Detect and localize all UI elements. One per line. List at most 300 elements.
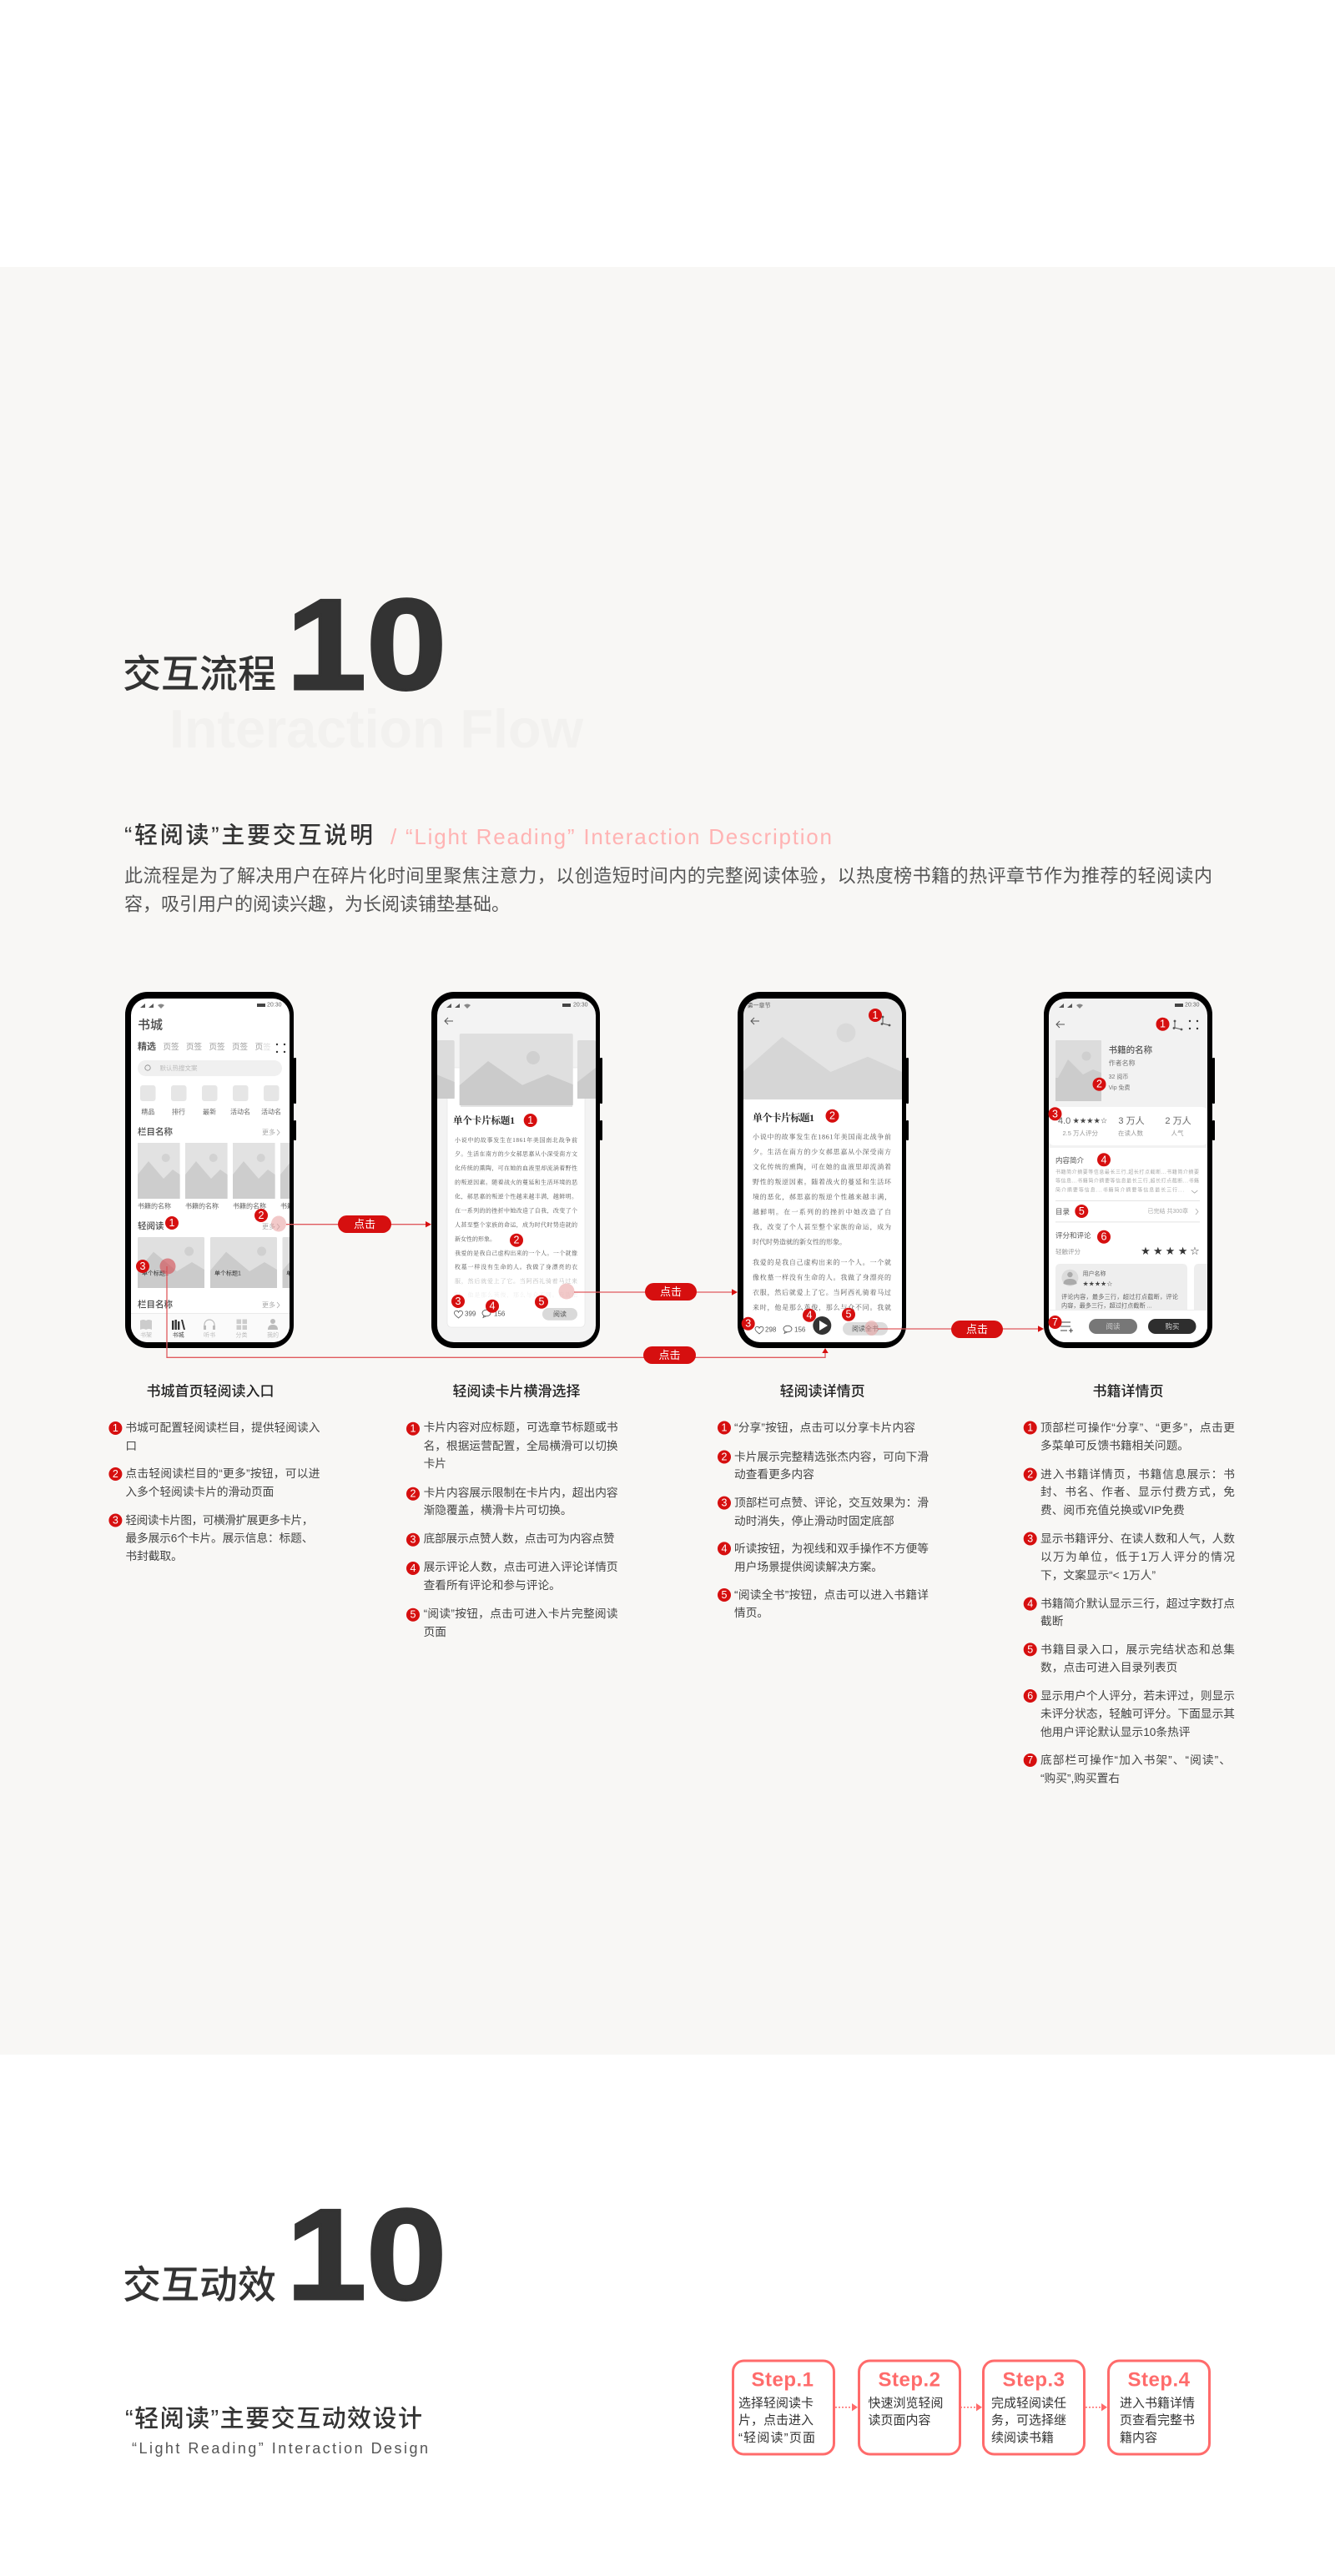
item 5	[718, 1588, 929, 1619]
intro block: 简介摘要等信息...书籍简介摘要等信息最长三行...	[1055, 1186, 1184, 1193]
chinese sub heading: “轻阅读”主要交互说明	[124, 823, 373, 848]
body text: 境的恶化，郝思嘉的叛逆个性越来越丰满，	[753, 1193, 891, 1201]
badges phone 2: 3	[456, 1296, 461, 1307]
item 1	[406, 1420, 618, 1470]
bottom tab bar: 书城	[173, 1331, 184, 1338]
item 6: 6	[1027, 1690, 1033, 1702]
phone 3: light reading detail	[738, 992, 909, 1348]
phone 1: bookstore home: 20:30	[267, 1003, 282, 1008]
touch hint: more	[271, 1216, 286, 1231]
badges phone 4: 6	[1101, 1231, 1107, 1243]
bottom tab bar: 书架	[140, 1331, 152, 1338]
stats panel: ★★★★☆	[1073, 1116, 1107, 1126]
comment card: 内容，最多三行，超过打点截断 ...	[1061, 1301, 1152, 1310]
rating row: ★	[1141, 1245, 1151, 1258]
section row: column name: 更多	[262, 1128, 275, 1136]
step 2 card: Step.2	[878, 2369, 941, 2391]
item 2: 2	[113, 1468, 118, 1480]
body text: 像枚墓一样没有生命的人。我做了身漂亮的	[753, 1273, 891, 1281]
item 4: 展示评论人数，点击可进入评论详情页	[424, 1561, 618, 1573]
badges phone 2: 2	[514, 1235, 520, 1246]
item 1	[1024, 1421, 1235, 1452]
item 1: 卡片内容对应标题，可选章节标题或书	[424, 1420, 618, 1433]
light reading cards	[138, 1237, 290, 1288]
intro block: 书籍简介摘要等信息最长三行,超长打点截断...书籍简介摘要	[1055, 1169, 1199, 1175]
item 3: 最多展示6个卡片。展示信息：标题、	[125, 1532, 313, 1545]
icon: back arrow	[751, 1018, 759, 1024]
title: 单个卡片标题1	[753, 1111, 814, 1124]
phone 4: book detail: 20:30	[1185, 1003, 1200, 1008]
badges phone 2: 4	[490, 1301, 496, 1312]
badges on phones	[136, 1009, 1170, 1331]
item 4	[718, 1542, 929, 1573]
item 2: 动查看更多内容	[734, 1467, 814, 1481]
stats panel: 人气	[1171, 1129, 1184, 1137]
item 2: 2	[722, 1452, 728, 1463]
bottom action bar	[1049, 1310, 1207, 1342]
stats panel: 2 万人	[1165, 1115, 1191, 1126]
item 1: 口	[125, 1440, 137, 1452]
badges phone 4: 2	[1096, 1079, 1102, 1090]
item 2	[406, 1486, 618, 1517]
item 5: “阅读全书”按钮，点击可以进入书籍详	[734, 1588, 929, 1602]
item 5: 5	[411, 1609, 416, 1621]
bottom tab bar	[131, 1313, 290, 1342]
item 3: 轻阅读卡片图，可横滑扩展更多卡片，	[125, 1513, 313, 1527]
body text: 夕。生活在南方的少女郝思嘉从小深受南方	[753, 1148, 891, 1156]
body text: 来时，他是那么英俊，那么与众不同。我就	[753, 1303, 891, 1312]
like and comment counts	[454, 1310, 506, 1318]
arrow 1 to 2	[835, 2403, 858, 2411]
step 3 card: Step.3	[1002, 2369, 1065, 2391]
item 1: 多菜单可反馈书籍相关问题。	[1040, 1438, 1189, 1452]
body text: 我，改变了个人甚至整个家族的命运，成为	[753, 1223, 891, 1231]
shortcut labels	[142, 1108, 280, 1114]
badges phone 3: 4	[807, 1310, 813, 1321]
section row: light reading: 轻阅读	[138, 1220, 164, 1231]
step 3 card: 续阅读书籍	[991, 2431, 1054, 2445]
like and comment counts	[755, 1326, 806, 1334]
big number 10: 10	[286, 2181, 446, 2327]
phone 4: book detail	[1044, 992, 1219, 1348]
description paragraph	[124, 866, 1212, 914]
section row: column name 2: 更多	[262, 1301, 275, 1309]
item 4: 书籍简介默认显示三行，超过字数打点	[1040, 1597, 1235, 1610]
item 3: 底部展示点赞人数，点击可为内容点赞	[424, 1532, 615, 1545]
side card right	[577, 1040, 596, 1099]
body text: 时代时势造就的新女性的形象。	[753, 1238, 846, 1246]
book info: 书籍的名称	[1109, 1044, 1153, 1055]
item 3: 动时消失，停止滑动时固定底部	[734, 1514, 894, 1527]
light reading cards: 单个	[286, 1270, 298, 1276]
ghost english title: Interaction Flow	[169, 698, 583, 759]
book thumbnails: 书籍的名称	[138, 1201, 171, 1210]
sub heading: motion design	[125, 2405, 428, 2457]
card body text: 在一系列的的挫折中她改造了自我，改变了个	[455, 1206, 577, 1215]
rating row: ★	[1178, 1245, 1187, 1258]
badges phone 3: 1	[873, 1009, 879, 1021]
header image	[743, 999, 902, 1099]
intro block: 内容简介	[1055, 1156, 1085, 1165]
book info	[1109, 1044, 1153, 1091]
item 6	[1024, 1688, 1235, 1738]
read full book button: 阅读全书	[852, 1325, 879, 1333]
card body text: 新女性的形象。	[455, 1235, 496, 1242]
item 2: 卡片展示完整精选张杰内容，可向下滑	[734, 1450, 929, 1463]
item 2: 费、阅币充值兑换或VIP免费	[1040, 1503, 1185, 1517]
catalog row: 目录	[1055, 1208, 1071, 1216]
chinese sub heading: “轻阅读”主要交互动效设计	[125, 2405, 422, 2433]
icon: share	[1173, 1020, 1182, 1030]
step 4 card: 进入书籍详情	[1120, 2396, 1195, 2411]
badges phone 4	[1048, 1018, 1170, 1329]
item 4: 4	[1027, 1598, 1033, 1610]
book thumbnails: 书籍的名称	[185, 1201, 219, 1210]
item 2: 卡片内容展示限制在卡片内，超出内容	[424, 1486, 618, 1499]
heading: 交互动效: 交互动效	[123, 2263, 276, 2307]
item 7: 底部栏可操作“加入书架”、“阅读”、	[1040, 1753, 1231, 1767]
arrow: from phone 3 to phone 4	[878, 1321, 1044, 1338]
read button: 阅读	[553, 1310, 567, 1318]
stats panel: 在读人数	[1118, 1129, 1143, 1137]
item 3: 显示书籍评分、在读人数和人气，人数	[1040, 1532, 1235, 1545]
item 2	[1024, 1467, 1235, 1517]
item 6: 他用户评论默认显示10条热评	[1040, 1725, 1191, 1738]
item 3: 以万为单位，低于1万人评分的情况	[1040, 1551, 1235, 1563]
item 3: 书封截取。	[125, 1550, 183, 1562]
card panel	[447, 1068, 585, 1327]
phone 1: bookstore home	[125, 992, 296, 1348]
section row: column name	[138, 1127, 280, 1136]
card body text: 化传统的熏陶，可在她的血液里却流淌着野性	[455, 1165, 577, 1173]
book thumbnails: 书籍的名称	[233, 1201, 266, 1210]
stats panel: 2.5 万人评分	[1062, 1130, 1098, 1137]
item 3: 下，文案显示“< 1万人”	[1040, 1568, 1156, 1582]
touch hint: read	[559, 1283, 574, 1300]
badges phone 4: 5	[1079, 1205, 1085, 1217]
phone 2: card swipe selection: 20:30	[573, 1003, 588, 1008]
step 2 card: 读页面内容	[868, 2413, 931, 2428]
body text: 野性的叛逆因素。随着战火的蔓延和生活环	[753, 1178, 892, 1186]
item 3: 3	[1027, 1533, 1033, 1545]
rating row	[1055, 1231, 1200, 1258]
item 4: 用户场景提供阅读解决方案。	[734, 1560, 883, 1573]
arrow: from phone 1 card to phone 3: 点击	[658, 1349, 681, 1361]
section row: light reading: 更多	[262, 1222, 275, 1230]
arrow: from phone 2 to phone 3	[574, 1283, 738, 1301]
icon: play button	[813, 1316, 831, 1335]
item 1: “分享”按钮，点击可以分享卡片内容	[734, 1421, 915, 1434]
item 1: 1	[1027, 1421, 1033, 1433]
badges phone 4: 3	[1052, 1108, 1058, 1119]
item 7	[1024, 1753, 1231, 1785]
body text	[753, 1133, 892, 1312]
like and comment counts: 298	[765, 1326, 777, 1333]
badges phone 4: 4	[1101, 1154, 1107, 1165]
card body text: 服，然后就爱上了它。当阿西礼骑着马过来	[455, 1277, 577, 1285]
phone 3: light reading detail: 第一章节	[748, 1001, 771, 1009]
tabs: 页签	[186, 1042, 203, 1052]
description paragraph: 此流程是为了解决用户在碎片化时间里聚焦注意力，以创造短时间内的完整阅读体验，以热度榜书籍的热评章节作为推荐的轻阅读内	[124, 866, 1212, 886]
tabs: 精选	[138, 1040, 156, 1052]
comment card: 用户名称	[1083, 1270, 1106, 1277]
card title: 单个卡片标题1	[453, 1114, 515, 1126]
step 4 card: Step.4	[1127, 2369, 1191, 2391]
rating row: ★	[1153, 1245, 1163, 1258]
column heading: 轻阅读详情页	[780, 1383, 865, 1400]
shortcut labels: 活动名	[230, 1108, 250, 1116]
item 5: 书籍目录入口，展示完结状态和总集	[1040, 1643, 1235, 1656]
body text: 小说中的故事发生在1861年美国南北战争前	[753, 1133, 891, 1141]
item 3: 顶部栏可点赞、评论，交互效果为：滑	[734, 1496, 929, 1509]
badges phone 1: 1	[169, 1217, 175, 1229]
item 2: 2	[411, 1488, 416, 1500]
step 1 card: 片，点击进入	[738, 2413, 814, 2428]
arrow: from phone 3 to phone 4: 点击	[966, 1323, 988, 1336]
item 3: 3	[113, 1515, 118, 1527]
column heading: 书籍详情页	[1093, 1383, 1163, 1400]
bottom action bar: 购买	[1165, 1322, 1180, 1331]
section header: interaction flow	[123, 571, 583, 759]
item 2	[718, 1450, 929, 1481]
catalog row	[1055, 1207, 1200, 1222]
icon: back arrow	[445, 1018, 453, 1024]
tabs	[138, 1040, 285, 1053]
light reading cards: 单个标题1	[142, 1270, 169, 1276]
item 1: 名，根据运营配置，全局横滑可以切换	[424, 1439, 618, 1452]
stats panel	[1049, 1107, 1207, 1342]
search bar	[138, 1060, 282, 1076]
section row: column name 2: 栏目名称	[138, 1299, 173, 1310]
step 1 card: Step.1	[751, 2369, 814, 2391]
column 2: card swipe	[406, 1383, 618, 1638]
tabs: 页签	[209, 1042, 225, 1052]
touch hint: read full book	[864, 1321, 878, 1336]
item 5	[1024, 1643, 1235, 1673]
light reading cards: 单个标题1	[214, 1270, 241, 1276]
card body text: 我爱的是我自己虚构出来的一个人。一个就像	[455, 1249, 577, 1256]
item 4: 4	[411, 1562, 416, 1574]
catalog row: 已完结 共300章	[1148, 1207, 1188, 1215]
comment card: 评论内容，最多三行，超过打点截断，评论	[1061, 1293, 1179, 1301]
badges phone 3: 3	[745, 1318, 751, 1330]
body text: 衣服，然后就爱上了它。当阿西礼骑着马过	[753, 1288, 891, 1297]
badges phone 2: 1	[527, 1114, 533, 1126]
book thumbnails: 书籍的名称	[280, 1201, 314, 1210]
step 1 card: 选择轻阅读卡	[738, 2396, 814, 2411]
column 1: bookstore home entry	[108, 1383, 320, 1562]
item 4	[406, 1561, 618, 1592]
item 4	[1024, 1597, 1235, 1628]
card body text: 夕。生活在南方的少女郝思嘉从小深受南方文	[455, 1150, 577, 1158]
body text: 我爱的是我自己虚构出来的一个人。一个就	[753, 1258, 891, 1266]
card body text: 人甚至整个家族的命运，成为时代时势造就的	[455, 1220, 577, 1229]
item 5: 情页。	[734, 1607, 768, 1619]
side card left	[436, 1040, 455, 1099]
item 4: 截断	[1040, 1615, 1064, 1628]
shortcut labels: 精品	[141, 1108, 154, 1116]
english sub heading: “Light Reading” Interaction Design	[132, 2440, 428, 2457]
read button	[542, 1308, 577, 1321]
arrow: from phone 2 to phone 3: 点击	[660, 1285, 682, 1298]
arrow: from phone 1 card to phone 3	[167, 1266, 829, 1364]
item 2: 封、书名、作者、显示付费方式，免	[1040, 1486, 1235, 1498]
shortcut labels: 活动名	[261, 1108, 281, 1116]
touch hint: card	[160, 1258, 175, 1275]
book cover	[1055, 1040, 1101, 1101]
column 3: light reading detail	[718, 1383, 929, 1619]
item 5: 数，点击可进入目录列表页	[1040, 1662, 1177, 1673]
section row: column name 2	[138, 1300, 280, 1308]
item 2	[108, 1467, 320, 1498]
shortcut icons	[140, 1085, 279, 1101]
item 5	[406, 1607, 618, 1638]
item 3	[1024, 1532, 1235, 1582]
icon: more	[1189, 1020, 1198, 1029]
section row: light reading	[138, 1221, 280, 1230]
sub heading: light reading description	[124, 823, 832, 849]
item 3: 3	[722, 1497, 728, 1509]
description paragraph: 容，吸引用户的阅读兴趣，为长阅读铺垫基础。	[124, 894, 510, 914]
tabs: 页签	[255, 1042, 271, 1052]
step 1 card	[733, 2361, 834, 2454]
item 5: 5	[722, 1589, 728, 1601]
item 2: 点击轻阅读栏目的“更多”按钮，可以进	[125, 1467, 320, 1480]
item 1: 书城可配置轻阅读栏目，提供轻阅读入	[125, 1421, 320, 1434]
panel: interaction flow section	[0, 267, 1335, 2055]
section header: interaction motion	[123, 2181, 446, 2327]
stats panel: 4.0	[1058, 1116, 1071, 1126]
column 4: book detail	[1024, 1383, 1235, 1785]
badges phone 2: 5	[539, 1296, 545, 1308]
icon: share	[881, 1016, 890, 1026]
column heading: 轻阅读卡片横滑选择	[452, 1383, 581, 1400]
item 1	[108, 1421, 320, 1452]
like and comment counts: 399	[465, 1310, 476, 1318]
rating row: 评分和评论	[1055, 1231, 1091, 1240]
badges phone 1: 2	[259, 1210, 264, 1221]
tabs: 页签	[164, 1042, 179, 1052]
rating row: ★	[1166, 1245, 1175, 1258]
card body text: 枚墓一样没有生命的人。我做了身漂亮的衣	[455, 1263, 577, 1270]
item 1: 卡片	[424, 1457, 446, 1470]
item 4: 听读按钮，为视线和双手操作不方便等	[734, 1542, 929, 1555]
step 3 card	[983, 2361, 1085, 2454]
item 1: 1	[113, 1422, 118, 1434]
step 4 card	[1108, 2361, 1210, 2454]
item 2: 入多个轻阅读卡片的滑动页面	[125, 1485, 274, 1498]
item 1: 1	[411, 1423, 416, 1435]
book info: 32 阅币	[1109, 1074, 1128, 1080]
arrow 3 to 4	[1086, 2403, 1107, 2411]
book info: 作者名称	[1109, 1059, 1136, 1067]
item 3: 3	[411, 1534, 416, 1546]
icon: back arrow	[1056, 1021, 1065, 1028]
arrow: from phone 1 more button to phone 2	[286, 1215, 431, 1233]
badges phone 3: 5	[846, 1309, 852, 1321]
comment card	[1055, 1264, 1219, 1314]
item 1: 1	[722, 1421, 728, 1433]
bottom action bar: 阅读	[1106, 1322, 1121, 1331]
shortcut labels: 排行	[172, 1108, 185, 1116]
step 2 card: 快速浏览轻阅	[868, 2396, 943, 2411]
step 3 card: 务，可选择继	[991, 2413, 1066, 2428]
comment card: ★★★★☆	[1083, 1280, 1112, 1288]
step 2 card	[859, 2361, 960, 2454]
badges phone 4: 7	[1052, 1316, 1058, 1328]
card body text: 时，他是那么英俊，那么与众不同。我就把	[455, 1291, 577, 1300]
step 4 card: 页查看完整书	[1120, 2413, 1195, 2428]
card body text: 化，郝思嘉的叛逆个性越来越丰满，越鲜明。	[455, 1192, 577, 1200]
book thumbnails	[138, 1143, 290, 1210]
body text: 文化传统的熏陶，可在她的血液里却流淌着	[753, 1163, 891, 1171]
card body text: 小说中的故事发生在1861年美国南北战争前	[455, 1136, 577, 1144]
badges phone 1: 3	[140, 1260, 146, 1272]
arrow 2 to 3	[960, 2403, 982, 2411]
card body text: 的叛逆因素。随着战火的蔓延和生活环境的恶	[455, 1179, 578, 1186]
shortcut labels: 最新	[203, 1108, 216, 1116]
body text: 越鲜明。在一系列的的挫折中她改造了自	[753, 1208, 891, 1216]
title 书城: 书城	[138, 1018, 163, 1033]
item 2: 渐隐覆盖，横滑卡片可切换。	[424, 1503, 572, 1517]
english sub heading: / “Light Reading” Interaction Description	[390, 824, 832, 849]
bottom tab bar: 听书	[204, 1331, 215, 1338]
read full book button	[843, 1322, 888, 1336]
badges phone 3: 2	[829, 1110, 835, 1122]
step 4 card: 籍内容	[1120, 2431, 1157, 2445]
intro block	[1055, 1156, 1200, 1201]
step 1 card: “轻阅读”页面	[738, 2431, 815, 2445]
arrow: from phone 1 more button to phone 2: 点击	[354, 1218, 375, 1230]
item 3	[718, 1496, 929, 1527]
heading: 交互流程: 交互流程	[123, 652, 276, 696]
item 4: 4	[722, 1542, 728, 1554]
item 5: 页面	[424, 1626, 446, 1638]
badges phone 2	[451, 1114, 548, 1313]
steps flow	[733, 2361, 1210, 2454]
item 2: 2	[1027, 1468, 1033, 1480]
card body text	[455, 1136, 578, 1300]
intro block: 等信息...书籍简介摘要等信息最长三行,超长打点截断...书籍	[1055, 1178, 1199, 1185]
rating row: 轻触评分	[1055, 1247, 1081, 1255]
big number 10: 10	[286, 571, 446, 717]
section row: column name: 栏目名称	[138, 1126, 173, 1137]
item 2: 进入书籍详情页，书籍信息展示：书	[1040, 1467, 1235, 1481]
badges phone 3	[742, 1009, 882, 1331]
item 5: “阅读”按钮，点击可进入卡片完整阅读	[424, 1607, 618, 1620]
badges phone 1	[136, 1209, 268, 1273]
bottom tab bar: 分类	[235, 1331, 247, 1338]
tabs: 页签	[232, 1042, 249, 1052]
center card image	[460, 1034, 573, 1107]
item 7: 7	[1027, 1754, 1033, 1766]
step 3 card: 完成轻阅读任	[991, 2396, 1066, 2411]
item 3	[108, 1513, 313, 1562]
item 5: 5	[1027, 1643, 1033, 1655]
phone 2: card swipe selection	[431, 992, 602, 1348]
like and comment counts: 156	[494, 1310, 506, 1318]
search bar: 默认热搜文案	[160, 1064, 198, 1072]
column heading: 书城首页轻阅读入口	[147, 1383, 274, 1400]
item 1: 顶部栏可操作“分享”、“更多”，点击更	[1040, 1421, 1235, 1434]
badges phone 4: 1	[1160, 1019, 1166, 1030]
rating row: ☆	[1190, 1245, 1200, 1258]
item 6: 未评分状态，轻触可评分。下面显示其	[1040, 1708, 1235, 1720]
item 7: “购买”,购买置右	[1040, 1773, 1120, 1785]
item 4: 查看所有评论和参与评论。	[424, 1578, 561, 1592]
item 6: 显示用户个人评分，若未评过，则显示	[1040, 1688, 1235, 1702]
book info: Vip 免费	[1109, 1084, 1131, 1091]
